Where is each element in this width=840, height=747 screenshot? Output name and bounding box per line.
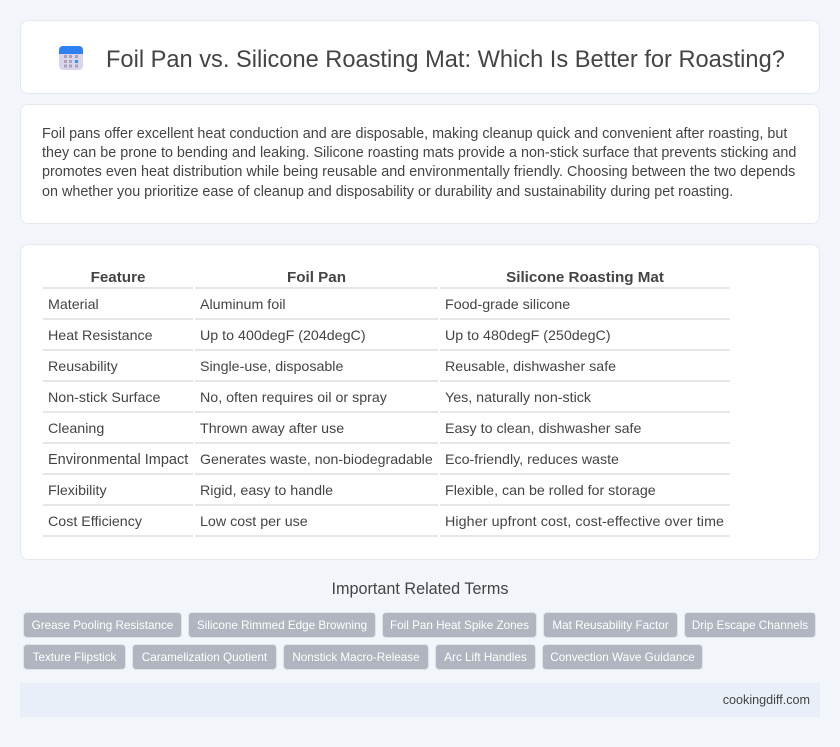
panel: comparison table bbox=[20, 244, 820, 560]
comparison table: Rigid, easy to handle bbox=[200, 483, 333, 499]
icon: calendar bbox=[59, 46, 83, 70]
related term tags: Arc Lift Handles bbox=[444, 651, 527, 664]
comparison table: Cleaning bbox=[48, 421, 104, 437]
comparison table: Higher upfront cost, cost-effective over time bbox=[445, 514, 724, 530]
comparison table: Flexibility bbox=[48, 483, 107, 499]
related term tags: Texture Flipstick bbox=[33, 651, 116, 664]
comparison table: No, often requires oil or spray bbox=[200, 390, 387, 406]
intro text: promotes even heat distribution while being reusable and environmentally friendly. Choosing between the two depends bbox=[42, 164, 795, 180]
related term tags: Nonstick Macro-Release bbox=[292, 651, 420, 664]
comparison table: Flexible, can be rolled for storage bbox=[445, 483, 656, 499]
panel: intro bbox=[20, 104, 820, 224]
intro text bbox=[42, 126, 796, 200]
comparison table: Foil Pan bbox=[287, 269, 346, 286]
comparison table: Up to 400degF (204degC) bbox=[200, 328, 366, 344]
footer bar bbox=[20, 683, 820, 717]
comparison table: Yes, naturally non-stick bbox=[445, 390, 591, 406]
related term tags: Caramelization Quotient bbox=[142, 651, 267, 664]
comparison table: Feature bbox=[91, 269, 145, 286]
related term tags: Silicone Rimmed Edge Browning bbox=[197, 619, 367, 632]
comparison table: Thrown away after use bbox=[200, 421, 344, 437]
related term tags: Drip Escape Channels bbox=[692, 619, 808, 632]
comparison table: Material bbox=[48, 297, 99, 313]
comparison table: Cost Efficiency bbox=[48, 514, 142, 530]
intro text: they can be prone to bending and leaking. Silicone roasting mats provide a non-stick surface that prevents sticking and bbox=[42, 145, 796, 161]
comparison table: Non-stick Surface bbox=[48, 390, 160, 406]
related term tags: Foil Pan Heat Spike Zones bbox=[390, 619, 529, 632]
comparison table: Generates waste, non-biodegradable bbox=[200, 451, 433, 467]
comparison table: Easy to clean, dishwasher safe bbox=[445, 421, 641, 437]
intro text: on whether you prioritize ease of cleanup and disposability or durability and sustainability during pet roasting. bbox=[42, 184, 733, 200]
comparison table: Reusability bbox=[48, 359, 118, 375]
title card bbox=[20, 20, 820, 94]
comparison table: Reusable, dishwasher safe bbox=[445, 359, 616, 375]
related term tags: Convection Wave Guidance bbox=[550, 651, 695, 664]
comparison table: Food-grade silicone bbox=[445, 297, 570, 313]
heading: related terms: Important Related Terms bbox=[332, 580, 508, 598]
related term tags bbox=[23, 612, 816, 670]
comparison table: Eco-friendly, reduces waste bbox=[445, 452, 619, 468]
comparison table: Single-use, disposable bbox=[200, 359, 343, 375]
comparison table: Aluminum foil bbox=[200, 297, 286, 313]
related term tags: Grease Pooling Resistance bbox=[32, 619, 173, 632]
comparison table: Low cost per use bbox=[200, 514, 308, 530]
related term tags: Mat Reusability Factor bbox=[552, 619, 669, 632]
comparison table bbox=[43, 269, 730, 537]
comparison table: Up to 480degF (250degC) bbox=[445, 328, 611, 344]
comparison table: Heat Resistance bbox=[48, 328, 153, 344]
intro text: Foil pans offer excellent heat conduction and are disposable, making cleanup quick and convenient after roasting, but bbox=[42, 126, 787, 142]
comparison table: Environmental Impact bbox=[48, 452, 188, 468]
footer source: cookingdiff.com bbox=[723, 693, 810, 707]
title: Foil Pan vs. Silicone Roasting Mat: Which Is Better for Roasting? bbox=[106, 47, 785, 73]
comparison table: Silicone Roasting Mat bbox=[506, 269, 664, 286]
